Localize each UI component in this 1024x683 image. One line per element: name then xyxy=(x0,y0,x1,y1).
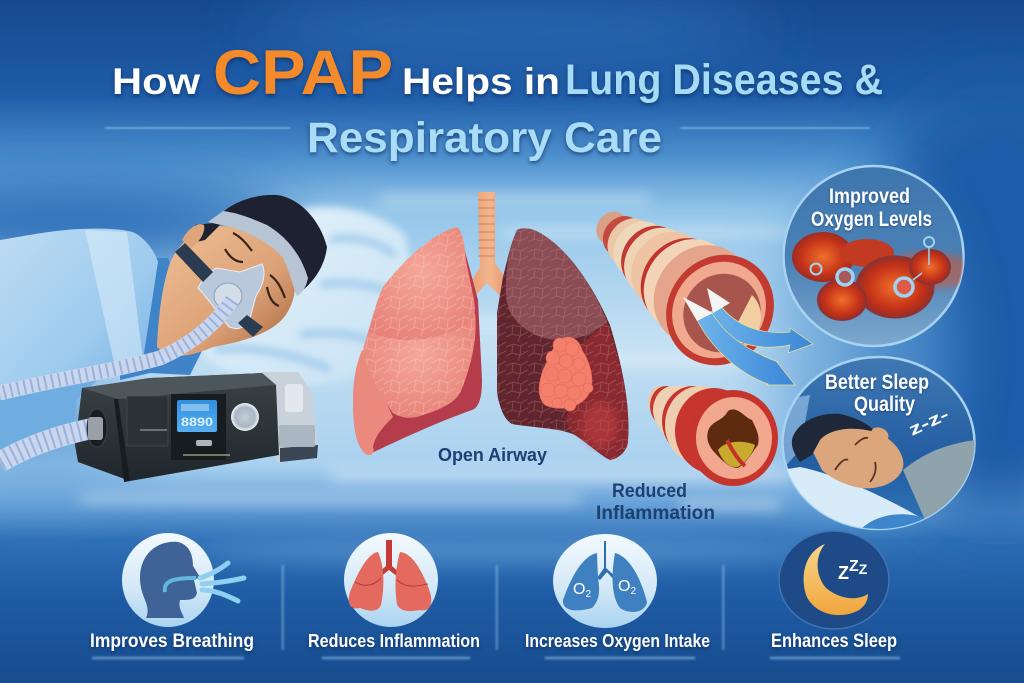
title words: Helps in: Helps in xyxy=(402,61,560,102)
face and neck xyxy=(157,226,295,356)
label: Open Airway: Open Airway xyxy=(438,445,547,465)
label: Reduced Inflammation xyxy=(596,481,715,524)
airflow arrows xyxy=(683,288,813,385)
bedding xyxy=(787,467,923,529)
benefit: enhances sleep xyxy=(771,531,897,652)
benefit: reduces inflammation xyxy=(308,533,480,651)
inflamed tube rings xyxy=(648,386,753,474)
middle lobe xyxy=(362,313,476,418)
shirt xyxy=(903,440,975,520)
arrow 1 xyxy=(707,305,813,353)
icon: red lungs xyxy=(344,533,438,627)
machine xyxy=(75,372,318,482)
icon: blue lungs with O2 xyxy=(553,534,657,628)
z glyphs: Z xyxy=(838,563,849,583)
label: Increases Oxygen Intake xyxy=(525,631,710,651)
machine: 8890 xyxy=(181,415,213,429)
upper lobe xyxy=(368,227,475,340)
label: Improves Breathing xyxy=(90,631,254,652)
lower blanket xyxy=(0,368,110,460)
trachea xyxy=(468,192,512,303)
panel title xyxy=(825,371,929,416)
mask xyxy=(198,264,264,329)
red blood cells xyxy=(792,232,970,320)
O2 left: O xyxy=(573,581,585,598)
diseased lung xyxy=(497,228,628,460)
head xyxy=(157,195,327,356)
lower hose xyxy=(0,409,107,462)
eyes xyxy=(225,233,285,306)
tube rings xyxy=(590,205,770,364)
machine body xyxy=(75,373,279,481)
head strap xyxy=(208,211,308,296)
title flanking lines xyxy=(105,127,870,129)
illustration: patient in bed with CPAP xyxy=(0,195,410,482)
O2 left: 2 xyxy=(585,589,591,600)
facial features xyxy=(835,438,876,482)
z glyphs: Z xyxy=(859,561,868,577)
side lobe xyxy=(353,350,393,455)
label: Reduces Inflammation xyxy=(308,631,480,651)
icon: breathing head xyxy=(122,533,244,627)
icon: moon and z xyxy=(779,531,889,629)
illustration: open airway tube xyxy=(590,205,813,387)
sleep glyphs z: z-z- xyxy=(906,405,952,440)
upper lobe xyxy=(506,228,607,340)
humidifier xyxy=(262,372,318,462)
back surface xyxy=(360,240,482,455)
title words: Lung Diseases &: Lung Diseases & xyxy=(565,56,883,104)
blanket xyxy=(0,229,158,400)
title line: Improved: Improved xyxy=(829,185,910,208)
sleeping man xyxy=(782,395,975,535)
title xyxy=(112,38,883,162)
title word: How: How xyxy=(112,61,200,102)
healthy lung xyxy=(353,227,482,455)
inflamed mouth xyxy=(688,390,778,486)
face xyxy=(812,425,903,488)
panel: better sleep quality xyxy=(782,357,975,535)
title line: Oxygen Levels: Oxygen Levels xyxy=(811,208,932,231)
upper hose xyxy=(0,300,232,393)
title line: Quality: Quality xyxy=(854,393,915,416)
display xyxy=(171,394,226,460)
hair xyxy=(192,195,327,290)
title line 2: Respiratory Care: Respiratory Care xyxy=(307,114,662,162)
O2 right: O xyxy=(618,578,630,595)
arrow 2 xyxy=(697,313,795,385)
illustration: lungs xyxy=(353,192,628,460)
tumour xyxy=(539,337,593,411)
pillow xyxy=(200,207,410,385)
lung base xyxy=(497,228,628,460)
panel: improved oxygen levels xyxy=(784,166,970,346)
sleeve xyxy=(120,258,205,380)
title word: CPAP: CPAP xyxy=(213,38,393,108)
panel title xyxy=(811,185,932,231)
panel xyxy=(127,396,168,446)
hair xyxy=(792,414,875,462)
label line: Reduced: Reduced xyxy=(612,481,687,502)
benefit: improves breathing xyxy=(90,533,254,652)
label: Enhances Sleep xyxy=(771,631,897,652)
ear xyxy=(872,427,889,438)
O2 right: 2 xyxy=(630,586,636,597)
z glyphs: Z xyxy=(849,558,859,575)
tube mouth xyxy=(644,233,796,387)
separators and underlines xyxy=(92,565,900,659)
lower right lobe xyxy=(567,322,628,460)
label line: Inflammation: Inflammation xyxy=(596,503,715,524)
illustration: inflamed airway xyxy=(648,386,778,486)
ear xyxy=(182,224,204,248)
mask straps xyxy=(175,243,263,337)
title line: Better Sleep: Better Sleep xyxy=(825,371,929,394)
benefit: increases oxygen intake xyxy=(525,534,710,651)
control knob xyxy=(231,403,259,431)
